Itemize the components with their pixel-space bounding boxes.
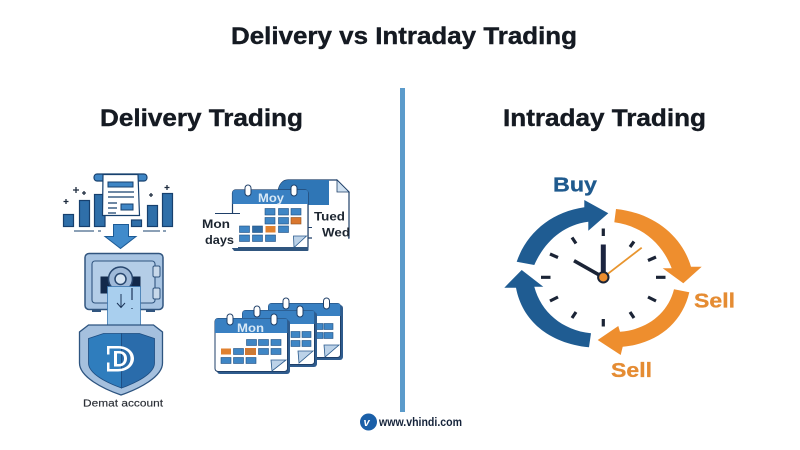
icon: down arrow xyxy=(105,224,136,248)
icon: demat shield xyxy=(80,325,162,395)
icon: calendar stack xyxy=(215,298,343,374)
label: demat account: Demat account xyxy=(83,398,163,410)
watermark: www.vhindi.com xyxy=(360,414,462,430)
icon: calendar moy: days xyxy=(205,233,234,247)
arrow: orange bottom xyxy=(598,289,689,355)
icon: calendar moy: Mon xyxy=(202,217,230,231)
label: buy: Buy xyxy=(553,174,598,196)
icon: calendar moy: Moy xyxy=(258,191,284,205)
center divider xyxy=(400,88,405,412)
icon: calendar stack: Mon xyxy=(237,321,264,335)
panel: intraday trading xyxy=(503,105,735,382)
heading: intraday trading: Intraday Trading xyxy=(503,105,706,132)
watermark: www.vhindi.com: www.vhindi.com xyxy=(378,415,462,429)
panel: delivery trading xyxy=(64,105,350,410)
title: Delivery vs Intraday Trading xyxy=(231,23,577,50)
icon: safe xyxy=(85,254,163,326)
icon: calendar moy: Tued xyxy=(314,210,345,224)
arrow: blue bottom xyxy=(504,270,591,347)
icon: calendar moy xyxy=(196,180,350,251)
heading: delivery trading: Delivery Trading xyxy=(100,105,303,132)
watermark: www.vhindi.com: v xyxy=(364,417,370,429)
icon: calendar moy: Wed xyxy=(322,226,350,240)
icon: clock face xyxy=(541,228,666,326)
arrow: blue top xyxy=(517,200,608,265)
arrow: orange top xyxy=(614,209,702,283)
label: sell bottom: Sell xyxy=(611,360,652,382)
label: sell right: Sell xyxy=(694,290,735,312)
icon: document with bar charts xyxy=(64,174,172,231)
